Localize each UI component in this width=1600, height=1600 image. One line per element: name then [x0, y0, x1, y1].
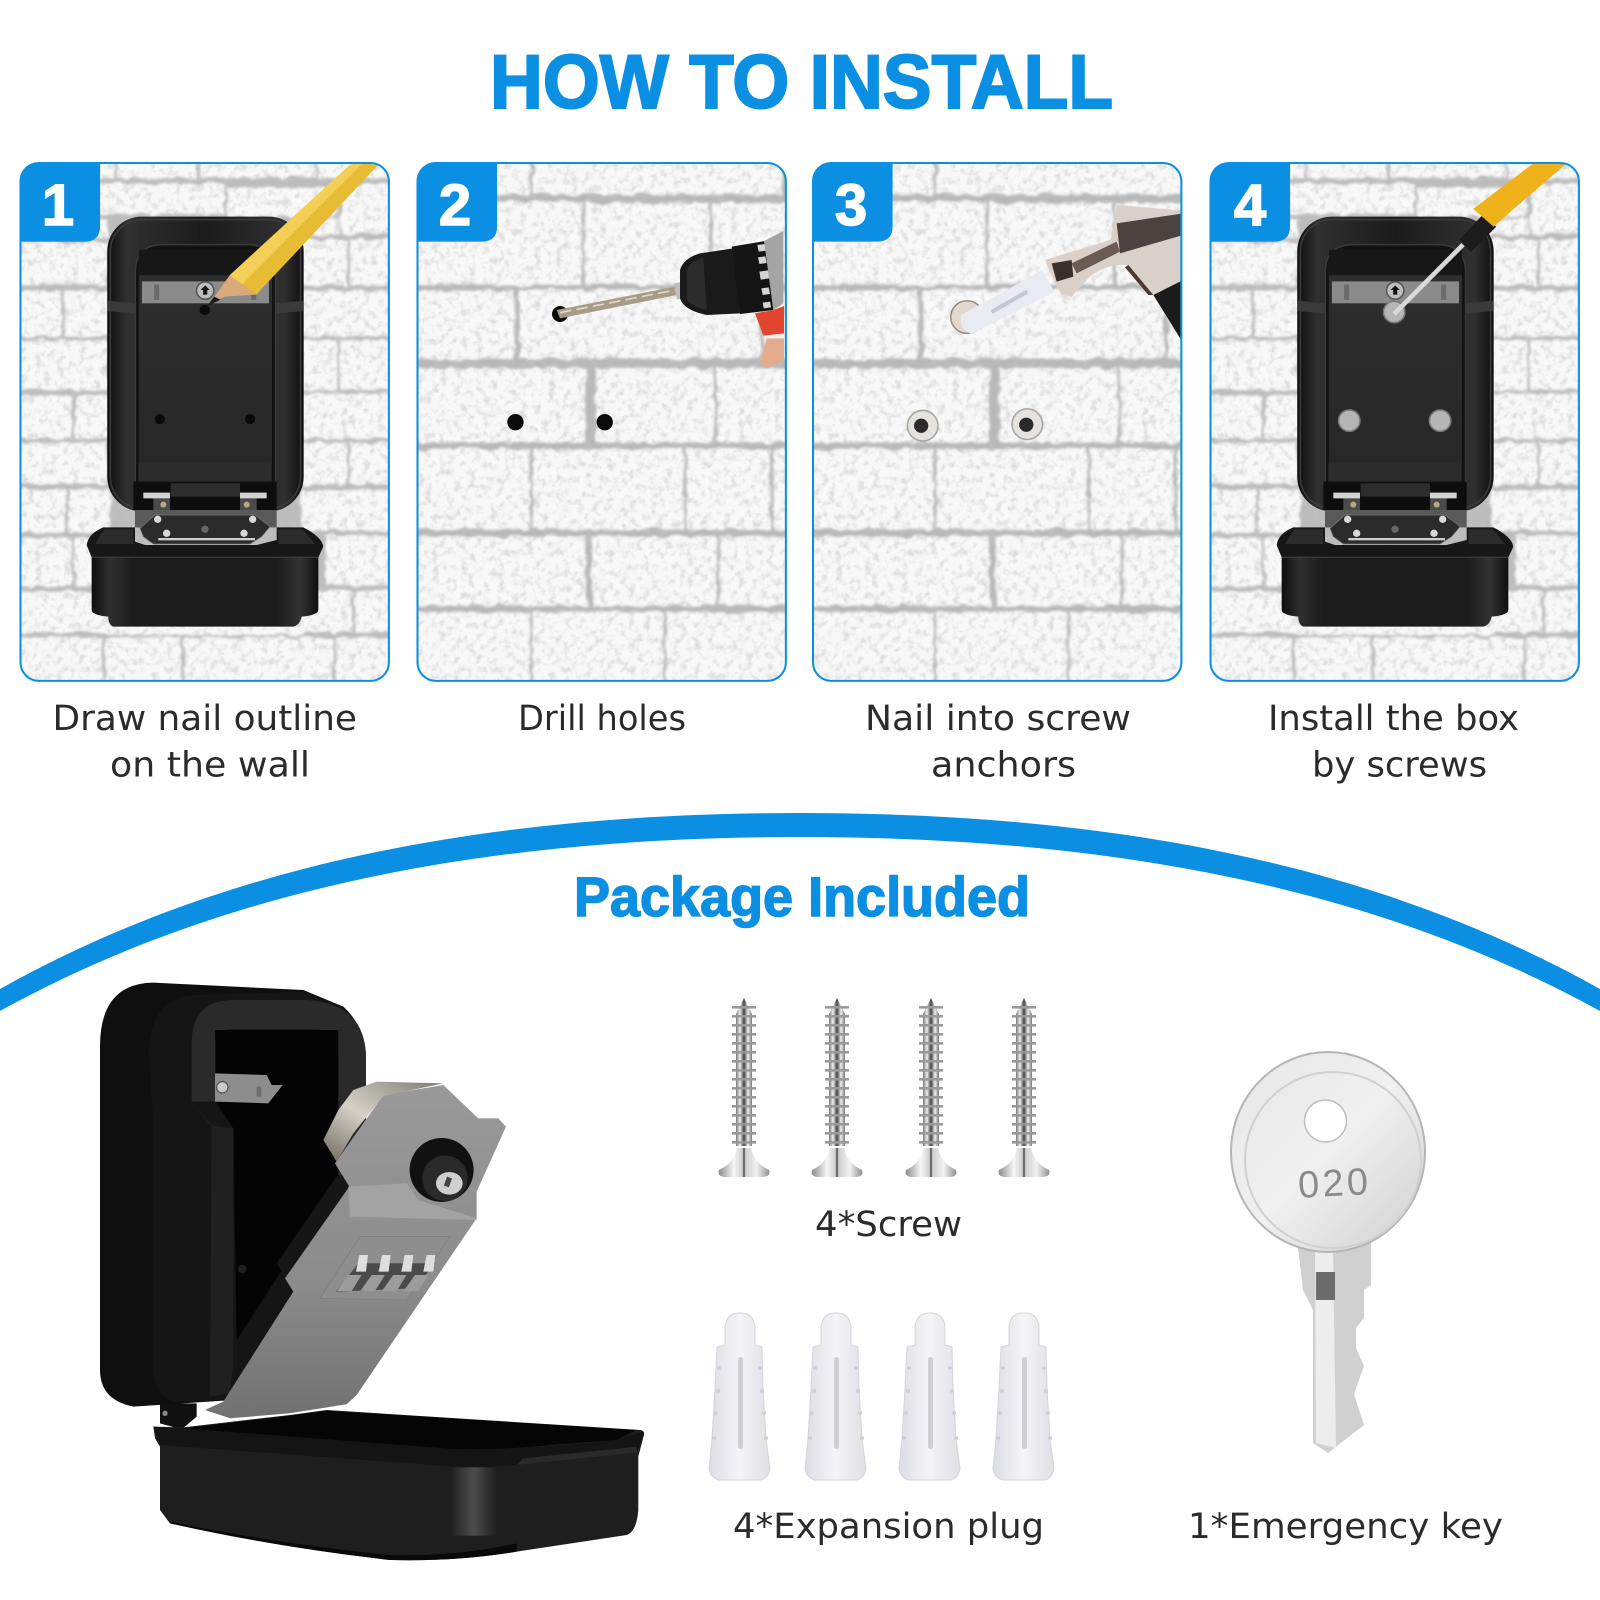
screws [719, 998, 1049, 1177]
black door back [277, 1173, 349, 1292]
mounting screws [1339, 301, 1451, 431]
panel: step 2 drill holes [402, 158, 795, 686]
lock box open on wall [87, 217, 323, 627]
icon: screwdriver [1394, 160, 1570, 314]
label: expansion plug: 4*Expansion plug [733, 1507, 1044, 1547]
lock body and door [100, 983, 506, 1418]
product: open key lock box [100, 983, 644, 1560]
bottom tray [153, 1403, 644, 1560]
heading: package included: Package Included [574, 865, 1030, 928]
caption: step 3: Nail into screw [865, 699, 1131, 739]
key number: 020 [1297, 1161, 1369, 1207]
caption: step 4: by screws [1312, 746, 1487, 786]
badge: step number 1 [20, 163, 100, 242]
lock knob [410, 1138, 474, 1202]
caption: step 1: on the wall [110, 746, 310, 786]
panel: step 4 install the box by screws [1205, 158, 1587, 686]
holes in wall [507, 414, 613, 430]
gray front door [205, 1082, 506, 1418]
label: emergency key: 1*Emergency key [1188, 1507, 1503, 1547]
icon: hammer [1045, 205, 1183, 343]
lock box open on wall [1277, 217, 1513, 627]
badge: step number 4 [1210, 163, 1290, 242]
anchor holes [907, 301, 1043, 441]
emergency key [1231, 1052, 1425, 1453]
step number 1: 1 [42, 173, 74, 238]
caption: step 3 [865, 699, 1131, 786]
icon: drill [552, 231, 784, 368]
icon: pencil [207, 160, 378, 306]
caption: step 4 [1268, 699, 1519, 786]
expansion plugs [709, 1313, 1054, 1480]
lock body [100, 983, 366, 1407]
label: screws: 4*Screw [815, 1205, 962, 1245]
panel: step 3 nail into screw anchors [806, 158, 1199, 686]
step number 4: 4 [1234, 173, 1266, 238]
badge: step number 3 [813, 163, 893, 242]
combination wheels [336, 1255, 435, 1292]
step number 3: 3 [835, 173, 867, 238]
step number 2: 2 [439, 173, 471, 238]
caption: step 4: Install the box [1268, 699, 1519, 739]
badge: step number 2 [418, 163, 497, 242]
caption: step 1: Draw nail outline [52, 699, 357, 739]
icon: plug in hole [961, 270, 1054, 334]
caption: step 1 [52, 699, 357, 786]
caption: step 2: Drill holes [518, 699, 686, 739]
title: HOW TO INSTALL [490, 40, 1113, 125]
panel: step 1 draw nail outline [15, 158, 397, 686]
caption: step 3: anchors [931, 746, 1076, 786]
blue arc divider [0, 813, 1600, 1011]
